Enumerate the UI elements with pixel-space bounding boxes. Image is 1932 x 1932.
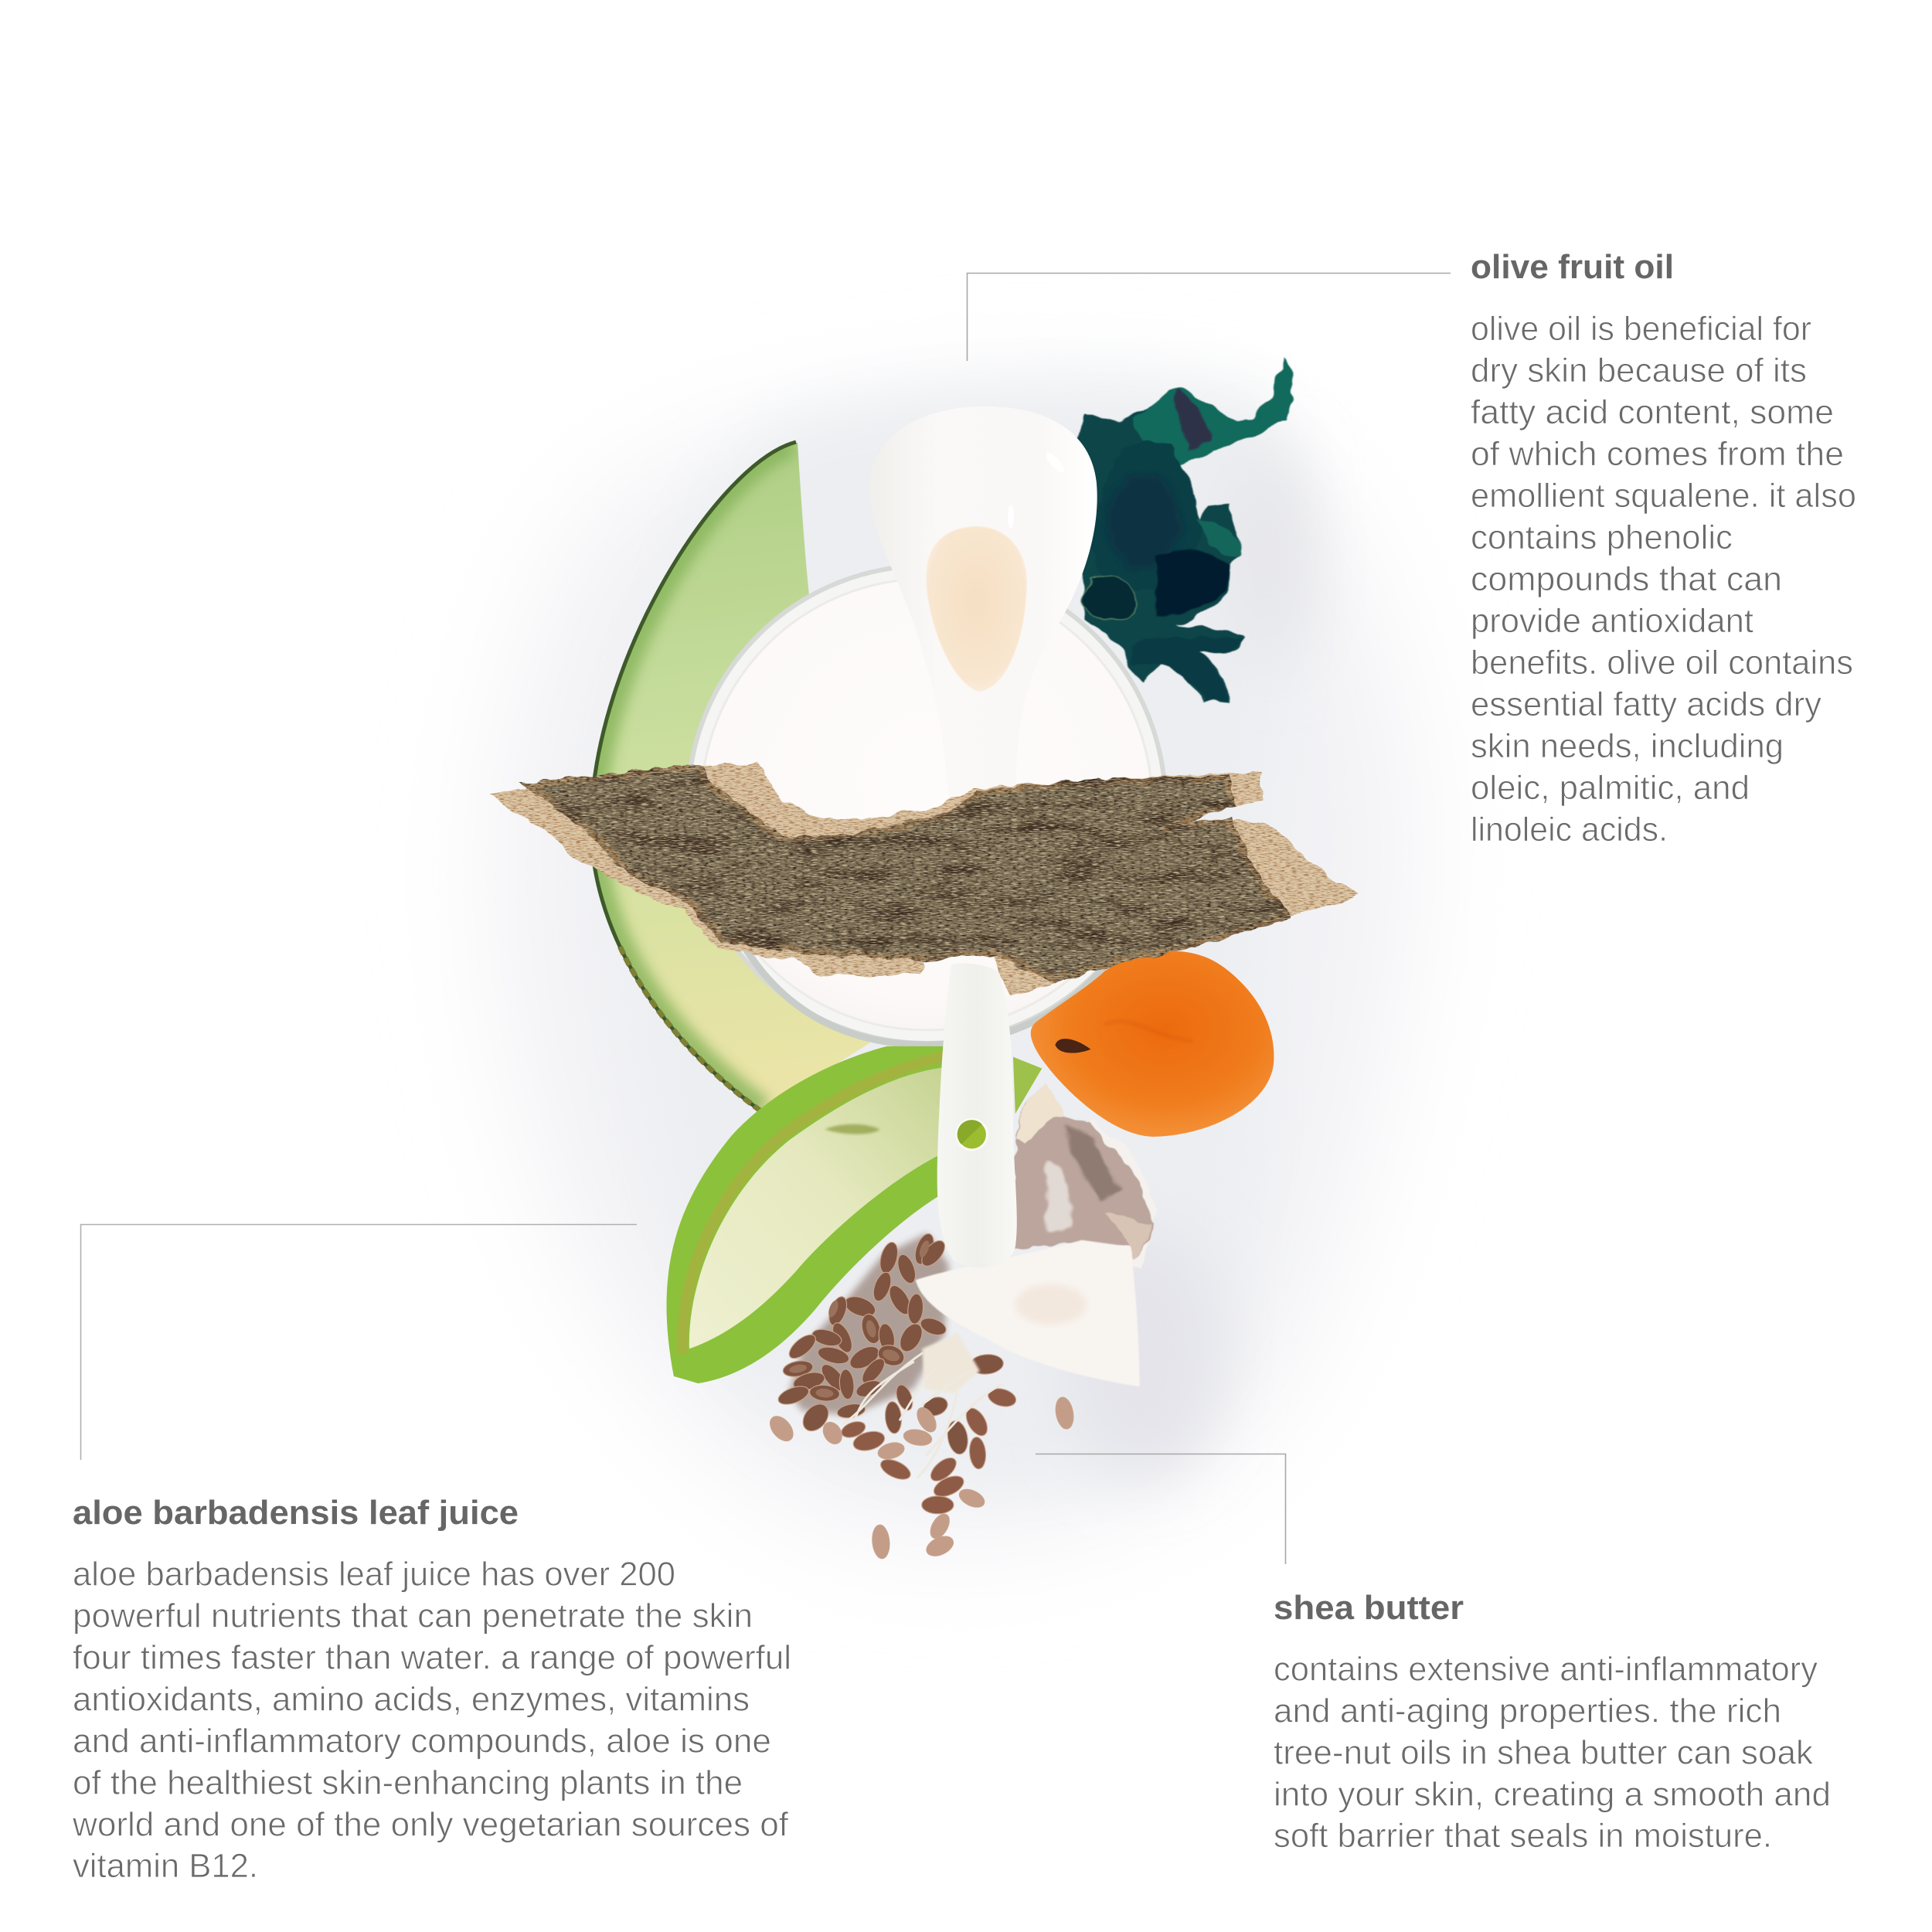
body: olive fruit oil: provide antioxidant <box>1471 602 1753 640</box>
body: olive fruit oil: emollient squalene. it also <box>1471 477 1856 515</box>
aloe leaf, spoon handle and lower ingredients <box>666 964 1158 1560</box>
spoon handle hole <box>955 1118 988 1151</box>
leader line: olive fruit oil <box>968 274 1451 361</box>
bark tan rim <box>488 764 1359 998</box>
seaweed tail <box>1135 359 1292 472</box>
oil pool <box>926 526 1027 692</box>
body: shea butter: tree-nut oils in shea butter can soak <box>1274 1734 1814 1771</box>
bark dark surface <box>529 768 1286 980</box>
flax seeds <box>766 1231 1076 1560</box>
body: olive fruit oil: skin needs, including <box>1471 727 1784 765</box>
body: aloe: vitamin B12. <box>73 1847 258 1885</box>
body: aloe: aloe barbadensis leaf juice has over 200 <box>73 1555 675 1594</box>
body: olive fruit oil: olive oil is beneficial for <box>1471 310 1811 348</box>
body: aloe <box>72 1555 791 1885</box>
soft halo behind the ingredients <box>494 386 1415 1542</box>
body: olive fruit oil: essential fatty acids dry <box>1471 685 1821 723</box>
body: olive fruit oil: oleic, palmitic, and <box>1471 769 1750 807</box>
body: aloe: and anti-inflammatory compounds, aloe is one <box>73 1722 771 1760</box>
heading: aloe: aloe barbadensis leaf juice <box>73 1494 519 1532</box>
seaweed body <box>1073 359 1292 703</box>
coconut fibres <box>842 1333 1002 1478</box>
heading: olive fruit oil: olive fruit oil <box>1471 248 1674 286</box>
spoon highlights <box>1008 451 1067 529</box>
body: aloe: four times faster than water. a range of powerful <box>73 1638 791 1677</box>
body: aloe: antioxidants, amino acids, enzymes, vitamins <box>73 1680 750 1719</box>
body: olive fruit oil: compounds that can <box>1471 560 1782 598</box>
bark strip <box>488 764 1359 998</box>
body: aloe: of the healthiest skin-enhancing plants in the <box>73 1764 743 1802</box>
body: shea butter: contains extensive anti-inflammatory <box>1274 1651 1818 1688</box>
apricot <box>1031 951 1274 1137</box>
body: olive fruit oil <box>1471 310 1856 849</box>
text block: aloe barbadensis leaf juice <box>72 1494 791 1885</box>
avocado slice <box>591 442 869 1111</box>
body: shea butter: and anti-aging properties. the rich <box>1274 1692 1781 1730</box>
spoon <box>869 406 1097 798</box>
illustration: ingredients <box>488 359 1359 1560</box>
body: shea butter <box>1274 1651 1831 1855</box>
leader line: aloe <box>80 1224 637 1460</box>
body: olive fruit oil: dry skin because of its <box>1471 352 1807 389</box>
aloe inner rim <box>682 1056 947 1353</box>
body: olive fruit oil: fatty acid content, some <box>1471 393 1834 431</box>
body: olive fruit oil: linoleic acids. <box>1471 811 1668 849</box>
shea nut <box>1013 1083 1158 1269</box>
body: olive fruit oil: of which comes from the <box>1471 435 1844 473</box>
spoon handle <box>937 964 1017 1267</box>
body: olive fruit oil: benefits. olive oil contains <box>1471 644 1853 682</box>
body: aloe: world and one of the only vegetarian sources of <box>72 1805 789 1844</box>
aloe leaf skin <box>666 1046 947 1383</box>
spoon bowl holding oil <box>869 406 1097 798</box>
aloe leaf flesh <box>689 1067 947 1349</box>
heading: shea butter: shea butter <box>1274 1589 1464 1627</box>
glass dish with cream <box>688 566 1165 1045</box>
body: shea butter: soft barrier that seals in moisture. <box>1274 1817 1772 1855</box>
text block: shea butter <box>1274 1589 1831 1855</box>
body: shea butter: into your skin, creating a smooth and <box>1274 1776 1831 1813</box>
body: olive fruit oil: contains phenolic <box>1471 519 1733 556</box>
text block: olive fruit oil <box>1471 248 1856 849</box>
apricot seed mark <box>1055 1039 1090 1053</box>
leader line: shea butter <box>1036 1454 1286 1564</box>
coconut chunk <box>916 1240 1140 1386</box>
body: aloe: powerful nutrients that can penetrate the skin <box>73 1597 753 1635</box>
seaweed <box>1073 359 1292 703</box>
